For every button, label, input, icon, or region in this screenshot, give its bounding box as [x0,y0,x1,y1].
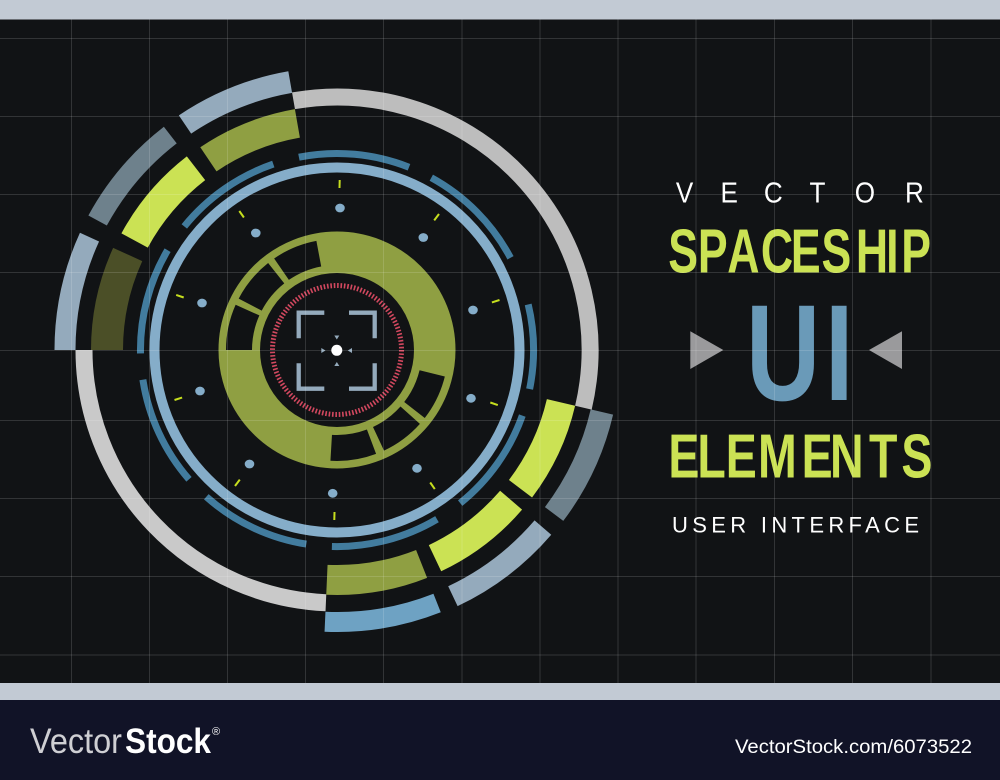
heading: UI: UI [746,276,853,429]
subheading: USER INTERFACE: USER INTERFACE [672,513,919,538]
footer logo [30,722,220,761]
targeting brackets [299,313,375,389]
outer segment: slate right [554,412,602,514]
heading: SPACESHIP: SPACESHIP [668,218,931,286]
footer band [0,700,1000,780]
centre arrowheads [321,336,352,366]
heading: VECTOR: VECTOR [676,176,924,209]
middle segment: lime lower right [435,500,511,558]
bottom bar [0,683,1000,700]
top bar [0,0,1000,20]
light blue ring [154,168,520,532]
outer grey ring, upper right [294,97,590,408]
radial HUD [65,82,602,622]
footer logo: ® [212,726,220,738]
outer segment: light top [185,82,290,124]
middle segment: olive top [208,123,297,159]
blue dots [195,204,478,498]
footer logo: Stock [125,722,211,761]
olive donut [239,252,435,448]
dark blue dashed arcs [140,153,534,547]
heading: ELEMENTS: ELEMENTS [668,421,932,491]
outer segment: slate upper left [98,135,170,220]
footer image id: VectorStock.com/6073522 [735,736,972,758]
footer logo: Vector [30,722,122,761]
lime radial ticks [174,180,500,520]
arrow: left triangle [690,331,723,369]
red tick ring [272,286,402,414]
middle segment: lime right [520,402,561,489]
middle segment: olive bottom [327,564,422,580]
middle segment: dark olive left [107,254,128,350]
middle segment: lime upper left [135,168,196,240]
centre dot [331,345,342,356]
donut cutouts [239,254,432,448]
outer segment: blue bottom [325,603,437,622]
outer grey ring, lower left [84,350,326,603]
outer segment: light left [65,237,90,350]
outer segment: light lower right [453,528,543,596]
arrow: right triangle [869,331,902,369]
